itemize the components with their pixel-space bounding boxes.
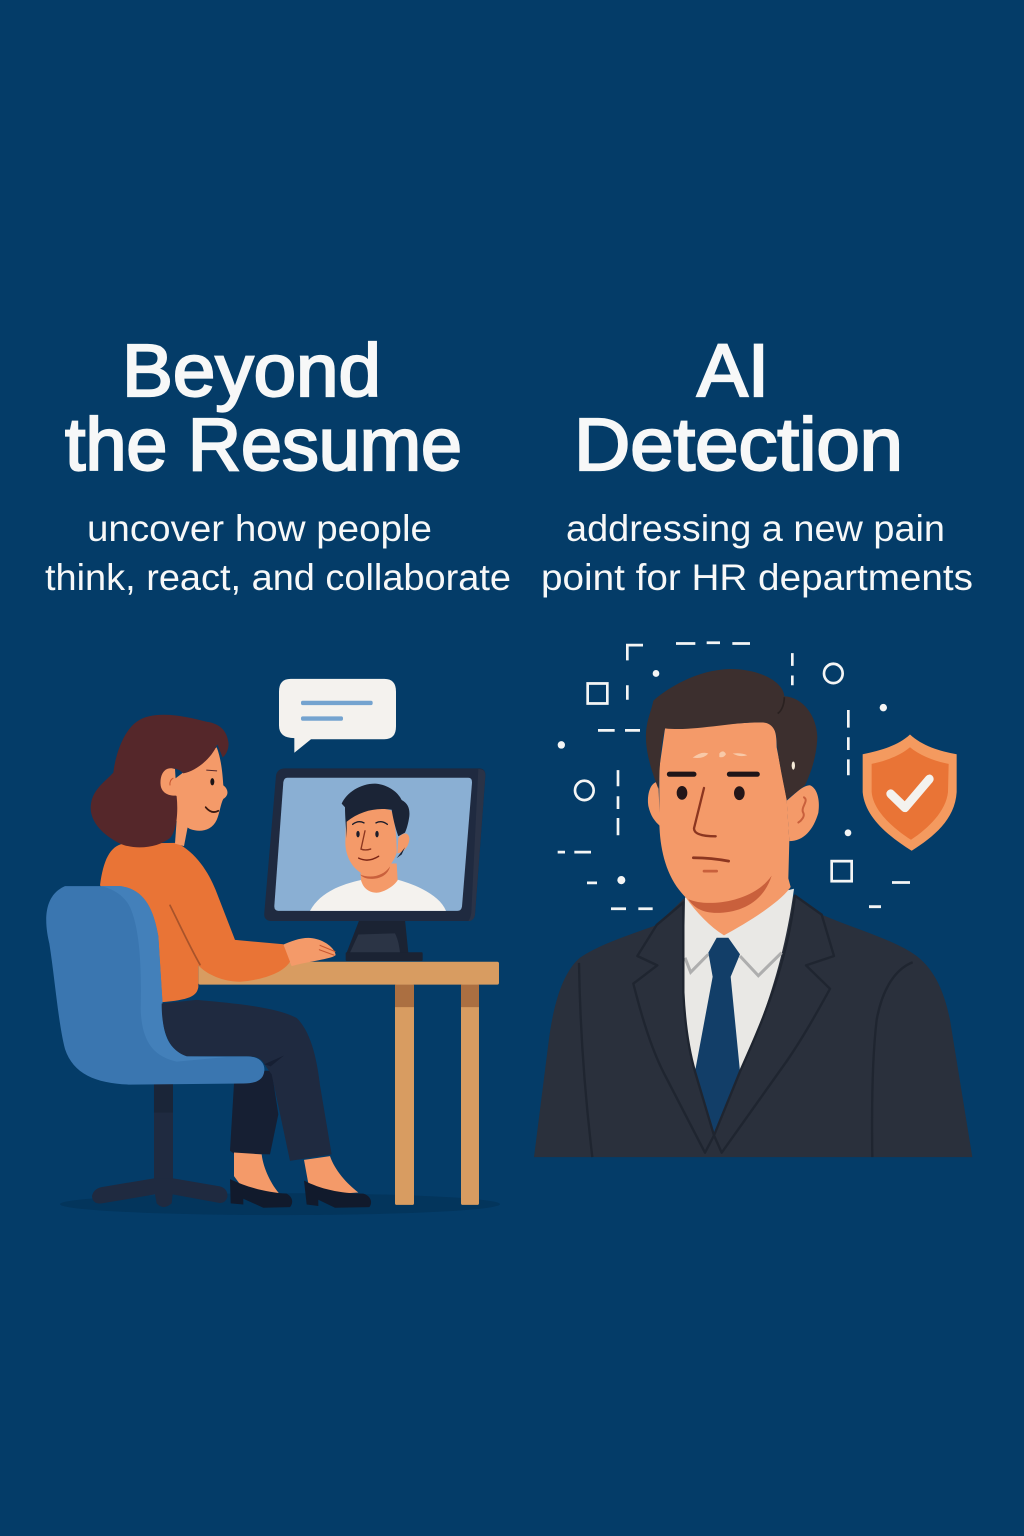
text block: right subtitle: point for HR departments xyxy=(541,557,973,598)
floor shadow xyxy=(60,1193,500,1215)
heading: Beyond the Resume: the Resume xyxy=(65,403,462,486)
sweater xyxy=(100,843,290,1002)
hand xyxy=(282,938,336,966)
decorative detection marks xyxy=(558,643,910,909)
suit lapels and seams xyxy=(633,896,834,1153)
text block: left subtitle: think, react, and collaborate xyxy=(45,557,511,598)
heading: Beyond the Resume: Beyond xyxy=(122,329,381,412)
desk xyxy=(198,962,499,1205)
text block: left subtitle: uncover how people xyxy=(87,508,432,549)
text block: right subtitle: addressing a new pain xyxy=(566,508,945,549)
illustration: woman on video call at desk xyxy=(46,679,500,1215)
tie xyxy=(695,938,740,1135)
far leg and shoe xyxy=(230,1071,292,1208)
heading: Beyond the Resume xyxy=(65,329,462,486)
heading: AI Detection: Detection xyxy=(574,403,903,486)
text block: right subtitle xyxy=(541,508,973,598)
shirt xyxy=(683,889,794,1072)
chair xyxy=(46,886,264,1207)
illustration: man in suit with AI detection shield xyxy=(534,643,972,1157)
heading: AI Detection: AI xyxy=(697,329,769,412)
collar shadow lines xyxy=(685,953,782,976)
monitor with video call xyxy=(264,768,485,961)
head xyxy=(646,669,819,935)
pants and near leg xyxy=(162,1000,371,1208)
shield with check mark xyxy=(863,735,957,851)
text block: left subtitle xyxy=(45,508,511,598)
suit xyxy=(534,896,972,1157)
panel: Beyond the Resume xyxy=(45,329,511,1215)
woman's head and hair xyxy=(91,715,229,847)
speech bubble xyxy=(279,679,396,753)
man on screen xyxy=(310,784,446,911)
panel: AI Detection xyxy=(534,329,973,1157)
heading: AI Detection xyxy=(574,329,903,486)
